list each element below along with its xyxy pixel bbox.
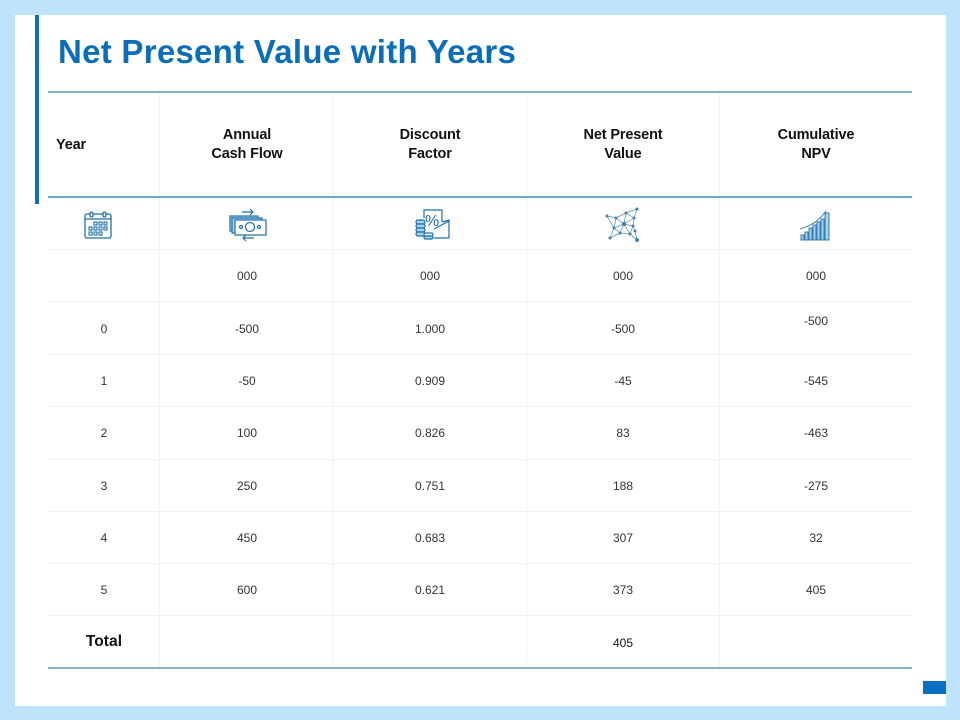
text: 83 (616, 426, 630, 440)
text: -500 (804, 314, 828, 328)
icon: discount percent and coins (415, 209, 450, 240)
header: Annual Cash Flow: Cash Flow (211, 146, 283, 162)
text: 0.826 (415, 426, 445, 440)
text: 250 (237, 479, 257, 493)
total value: 405 (613, 636, 633, 650)
text: -45 (614, 374, 632, 388)
text: -50 (238, 374, 256, 388)
text: 100 (237, 426, 257, 440)
text: 0.621 (415, 583, 445, 597)
row: year 3 (101, 479, 828, 493)
text: 373 (613, 583, 633, 597)
header: Annual Cash Flow: Annual (223, 127, 271, 143)
header: Net Present Value: Value (604, 146, 642, 162)
text: 000 (237, 269, 257, 283)
text: -500 (235, 322, 259, 336)
text: 0.751 (415, 479, 445, 493)
text: 000 (613, 269, 633, 283)
row label: Total: Total (86, 633, 122, 650)
header: Discount Factor: Factor (408, 146, 452, 162)
text: 405 (806, 583, 826, 597)
row: year 1 (101, 374, 828, 388)
header: Cumulative NPV: NPV (801, 146, 831, 162)
header: Year: Year (56, 137, 86, 153)
text: -500 (611, 322, 635, 336)
accent bar (35, 15, 39, 204)
row: year 4 (100, 531, 823, 545)
row: year 5 (101, 583, 826, 597)
header: Cumulative NPV: Cumulative (778, 127, 854, 143)
page marker (923, 681, 946, 694)
header: Net Present Value (584, 127, 662, 162)
icon: discount percent and coins: % (425, 213, 439, 230)
row: 000 (237, 269, 826, 283)
icon: network (606, 208, 639, 242)
header: Discount Factor: Discount (400, 127, 460, 143)
title: Net Present Value with Years (58, 33, 516, 70)
text: -463 (804, 426, 828, 440)
text: -275 (804, 479, 828, 493)
header: Annual Cash Flow (211, 127, 283, 162)
text: 450 (237, 531, 257, 545)
header: Cumulative NPV (778, 127, 854, 162)
text: 000 (806, 269, 826, 283)
text: 1.000 (415, 322, 445, 336)
text: 0 (101, 322, 107, 336)
text: 188 (613, 479, 633, 493)
text: 1 (101, 374, 107, 388)
header: Discount Factor (400, 127, 460, 162)
text: 307 (613, 531, 633, 545)
text: 4 (101, 531, 107, 545)
icon: growth chart (800, 210, 830, 240)
icon: calendar (84, 211, 112, 239)
text: 32 (809, 531, 823, 545)
text: 0.683 (415, 531, 445, 545)
icon: cash flow (229, 208, 267, 242)
row: year 0 (101, 314, 828, 336)
text: 3 (101, 479, 107, 493)
text: 5 (101, 583, 107, 597)
text: 600 (237, 583, 257, 597)
text: 000 (420, 269, 440, 283)
text: 0.909 (415, 374, 445, 388)
text: -545 (804, 374, 828, 388)
header: Net Present Value: Net Present (584, 127, 662, 143)
text: 2 (101, 426, 107, 440)
row: year 2 (101, 426, 828, 440)
